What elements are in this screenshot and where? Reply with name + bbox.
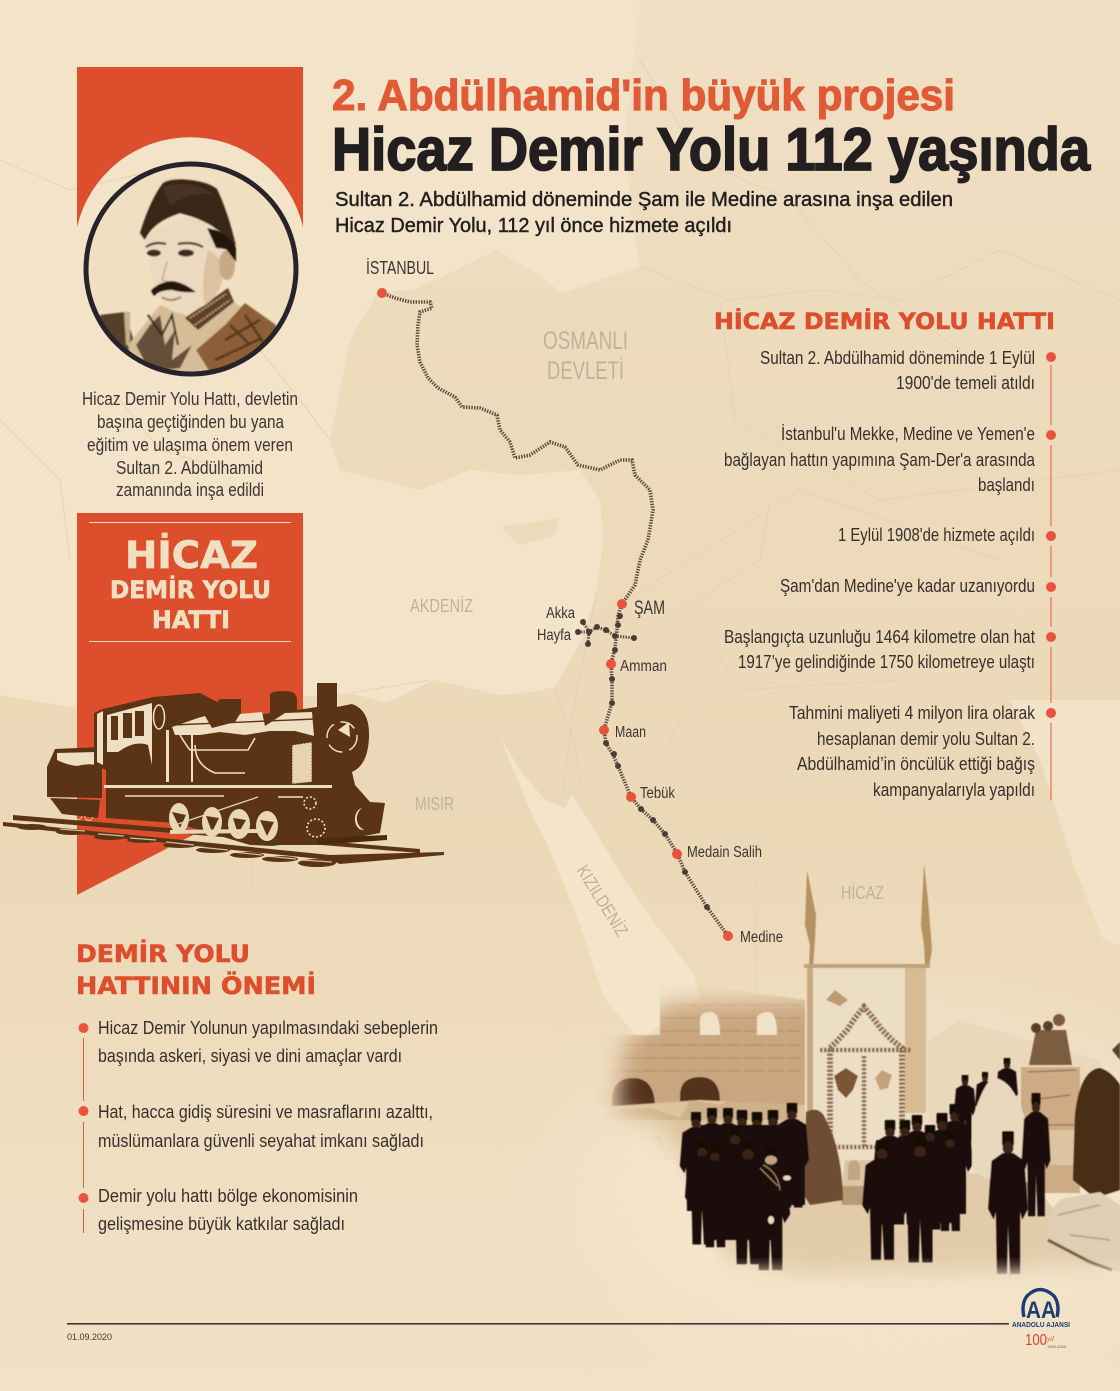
map region labels: KIZILDENİZ	[573, 862, 632, 940]
panel: Hicaz Demir Yolu Hattı banner	[77, 513, 303, 895]
logo: Anadolu Ajansı 100 yıl	[1012, 1290, 1070, 1349]
map region labels: MISIR	[415, 794, 454, 814]
fact: length	[724, 626, 1056, 672]
fact: cost: Tahmini maliyeti 4 milyon lira olarak	[789, 702, 1036, 723]
point 2: Hat, hacca gidiş süresini ve masraflarını azalttı,	[98, 1101, 433, 1122]
station labels: Akka	[546, 605, 575, 622]
heading: Hicaz Demir Yolu Hattı: HİCAZ DEMİR YOLU HATTI	[714, 307, 1055, 335]
map region labels: AKDENİZ	[410, 596, 473, 616]
fact: cost: Abdülhamid’in öncülük ettiği bağış	[797, 753, 1035, 774]
logo: Anadolu Ajansı 100 yıl: yıl	[1046, 1335, 1054, 1343]
map region labels: OSMANLI	[543, 327, 628, 355]
fact: route: bağlayan hattın yapımına Şam-Der'a arasında	[724, 449, 1036, 470]
panel: right railway facts	[714, 307, 1056, 800]
station labels: Amman	[620, 658, 667, 675]
fact: cost: kampanyalarıyla yapıldı	[873, 779, 1035, 800]
intermediate stations	[575, 613, 710, 910]
main railway line	[382, 293, 728, 936]
fact: foundation	[760, 347, 1056, 393]
heading line 2: HATTININ ÖNEMİ	[76, 970, 316, 1000]
subtitle line 2: Hicaz Demir Yolu, 112 yıl önce hizmete açıldı	[335, 214, 732, 237]
fact: cost	[789, 702, 1056, 800]
subtitle line 1: Sultan 2. Abdülhamid döneminde Şam ile Medine arasına inşa edilen	[335, 188, 953, 211]
fact: route: başlandı	[978, 474, 1035, 495]
portrait of Sultan Abdülhamid II	[85, 163, 297, 380]
fact: foundation: Sultan 2. Abdülhamid döneminde 1 Eylül	[760, 347, 1035, 368]
panel: importance of the railway	[76, 939, 438, 1234]
station labels: Hayfa	[537, 627, 571, 644]
logo: Anadolu Ajansı 100 yıl: 1920-2020	[1047, 1344, 1067, 1349]
station labels: Maan	[615, 724, 646, 741]
map region labels: DEVLETİ	[547, 356, 624, 385]
date: 01.09.2020	[67, 1332, 112, 1342]
driving wheels	[169, 797, 278, 841]
point 1	[78, 1017, 438, 1066]
railway route map	[366, 258, 783, 946]
fact: route: İstanbul'u Mekke, Medine ve Yemen'e	[781, 423, 1035, 444]
decorated ceremonial gate	[804, 964, 930, 1205]
station labels: Medain Salih	[687, 844, 762, 861]
portrait caption: Sultan 2. Abdülhamid	[116, 457, 263, 478]
point 1: Hicaz Demir Yolunun yapılmasındaki sebeplerin	[98, 1017, 438, 1038]
timeline line	[82, 1038, 84, 1233]
main stations	[377, 288, 733, 941]
banner heading: HİCAZ: HİCAZ	[125, 533, 258, 577]
portrait caption: Hicaz Demir Yolu Hattı, devletin	[82, 388, 298, 409]
fact: foundation: 1900'de temeli atıldı	[896, 372, 1035, 393]
portrait caption: başına geçtiğinden bu yana	[97, 411, 285, 432]
heading line 1: DEMİR YOLU	[76, 939, 250, 968]
fact: length: Başlangıçta uzunluğu 1464 kilometre olan hat	[724, 626, 1035, 647]
point 3: Demir yolu hattı bölge ekonomisinin	[98, 1185, 358, 1206]
logo: Anadolu Ajansı 100 yıl: 100	[1025, 1332, 1047, 1349]
station labels	[366, 258, 783, 946]
point 2: müslümanlara güvenli seyahat imkanı sağladı	[98, 1130, 424, 1151]
icon: steam locomotive on rails	[3, 683, 444, 867]
point 3	[78, 1185, 358, 1234]
tender	[47, 747, 102, 818]
flags	[805, 863, 932, 966]
portrait caption: zamanında inşa edildi	[116, 479, 264, 500]
fact: length: 1917’ye gelindiğinde 1750 kilometreye ulaştı	[738, 651, 1035, 672]
rails and sleepers	[3, 815, 444, 867]
footer line	[67, 1323, 1009, 1325]
station labels: Medine	[740, 929, 783, 946]
banner heading: HATTI: HATTI	[152, 606, 230, 634]
timeline line	[1050, 365, 1052, 800]
map region labels: HİCAZ	[841, 883, 884, 903]
historic photograph of the railway ceremony	[605, 864, 1120, 1280]
point 3: gelişmesine büyük katkılar sağladı	[98, 1213, 345, 1234]
title line 1: 2. Abdülhamid'in büyük projesi	[332, 71, 955, 120]
crowd of officials	[680, 1058, 1120, 1274]
station labels: İSTANBUL	[366, 258, 434, 278]
fact: extent: Şam'dan Medine'ye kadar uzanıyordu	[780, 575, 1035, 596]
fact: cost: hesaplanan demir yolu Sultan 2.	[817, 728, 1035, 749]
boiler and cab	[94, 683, 385, 846]
branch line to Hayfa	[578, 622, 634, 644]
panel: portrait red banner	[77, 67, 303, 227]
fact: route	[724, 423, 1056, 495]
fact: opening: 1 Eylül 1908'de hizmete açıldı	[838, 524, 1035, 545]
banner heading: DEMİR YOLU: DEMİR YOLU	[110, 575, 271, 604]
point 2	[78, 1101, 433, 1151]
logo: Anadolu Ajansı 100 yıl: AA	[1026, 1297, 1056, 1324]
portrait caption	[82, 388, 298, 500]
point 1: başında askeri, siyasi ve dini amaçlar vardı	[98, 1045, 402, 1066]
station labels: ŞAM	[634, 598, 665, 619]
seated onlookers on the wall	[1029, 1014, 1120, 1065]
title block	[332, 71, 1091, 237]
logo: Anadolu Ajansı 100 yıl: ANADOLU AJANSI	[1012, 1320, 1070, 1329]
station labels: Tebük	[640, 785, 675, 802]
map region labels	[410, 327, 884, 940]
portrait caption: eğitim ve ulaşıma önem veren	[87, 434, 293, 455]
